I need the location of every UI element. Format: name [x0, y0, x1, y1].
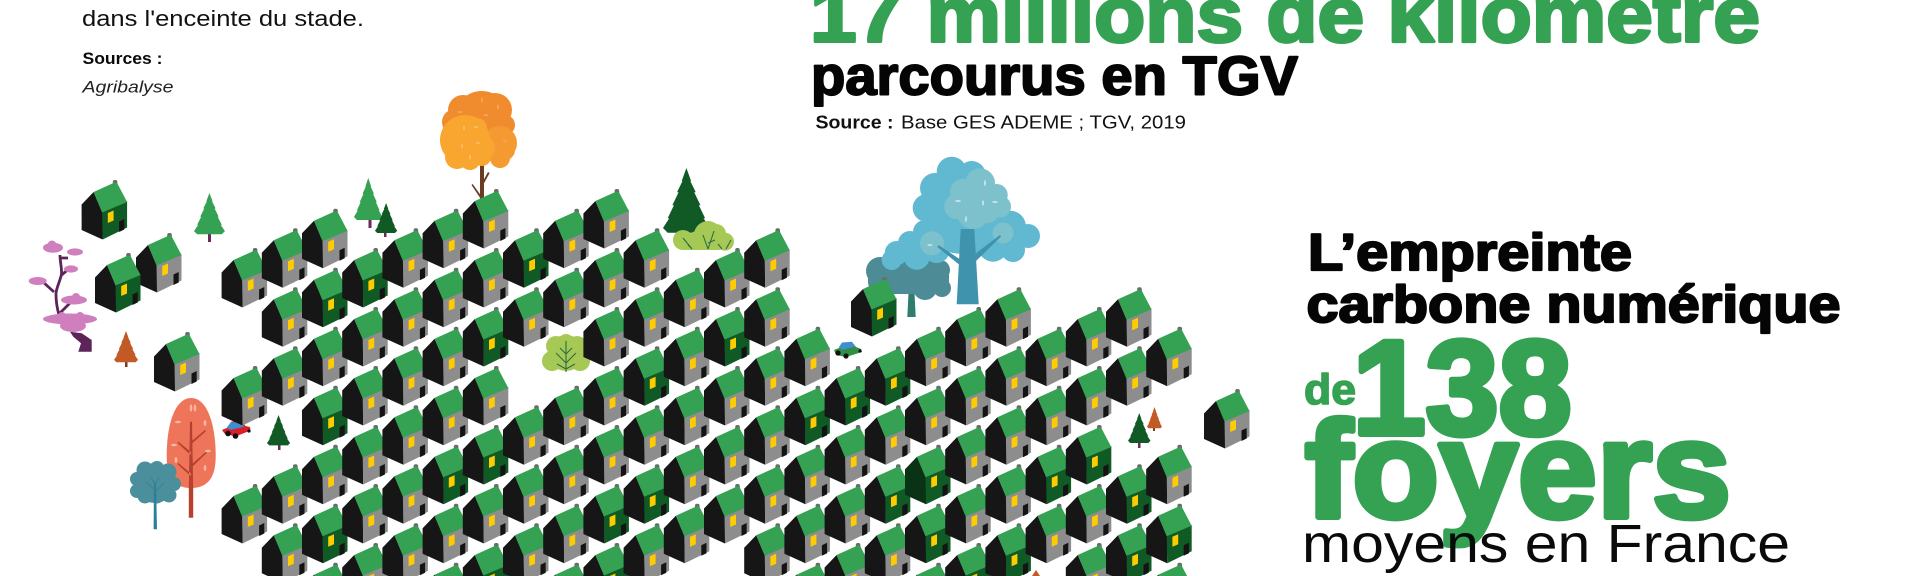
tree: green conifer left	[194, 193, 225, 242]
heading: carbone numérique: carbone numérique	[1306, 276, 1840, 334]
car: green	[834, 342, 862, 359]
source line TGV: Source :	[816, 112, 894, 132]
big word: foyers: foyers	[1305, 394, 1731, 547]
tree: dark conifer right	[1128, 413, 1150, 448]
sources text: Agribalyse	[81, 78, 174, 96]
tree: orange conifer tip bottom	[1032, 570, 1040, 576]
tree: dark teal behind	[866, 257, 951, 317]
caption: moyens en France: moyens en France	[1302, 514, 1790, 574]
tree: dark conifer by car	[267, 415, 290, 450]
tree: small orange conifer left	[114, 331, 138, 367]
tree: teal round	[130, 461, 181, 529]
bush: lime near centre	[542, 334, 590, 372]
bush: lime with branches	[673, 221, 734, 251]
heading: L'empreinte: L’empreinte	[1308, 224, 1632, 282]
sources heading: Sources :	[82, 50, 162, 68]
label: de: de	[1304, 366, 1356, 414]
tree: dark spruce centre	[663, 168, 710, 233]
headline: parcourus en TGV: parcourus en TGV	[811, 44, 1298, 106]
tree: green conifer middle	[354, 178, 382, 228]
source line TGV	[816, 112, 1186, 132]
village grid of houses	[222, 189, 1192, 576]
tree: dark conifer small	[375, 203, 397, 237]
source line TGV: Base GES ADEME ; TGV, 2019	[901, 112, 1186, 132]
car: red	[222, 421, 251, 439]
tree: small orange conifer right	[1147, 407, 1162, 431]
tree: salmon	[167, 398, 216, 518]
big number: 138: 138	[1353, 314, 1572, 463]
tree: pink	[29, 240, 97, 352]
standalone houses	[82, 180, 1250, 448]
intro text fragment: dans l'enceinte du stade.	[82, 6, 364, 31]
tree: blue large	[882, 157, 1040, 304]
tree: orange	[440, 91, 517, 200]
